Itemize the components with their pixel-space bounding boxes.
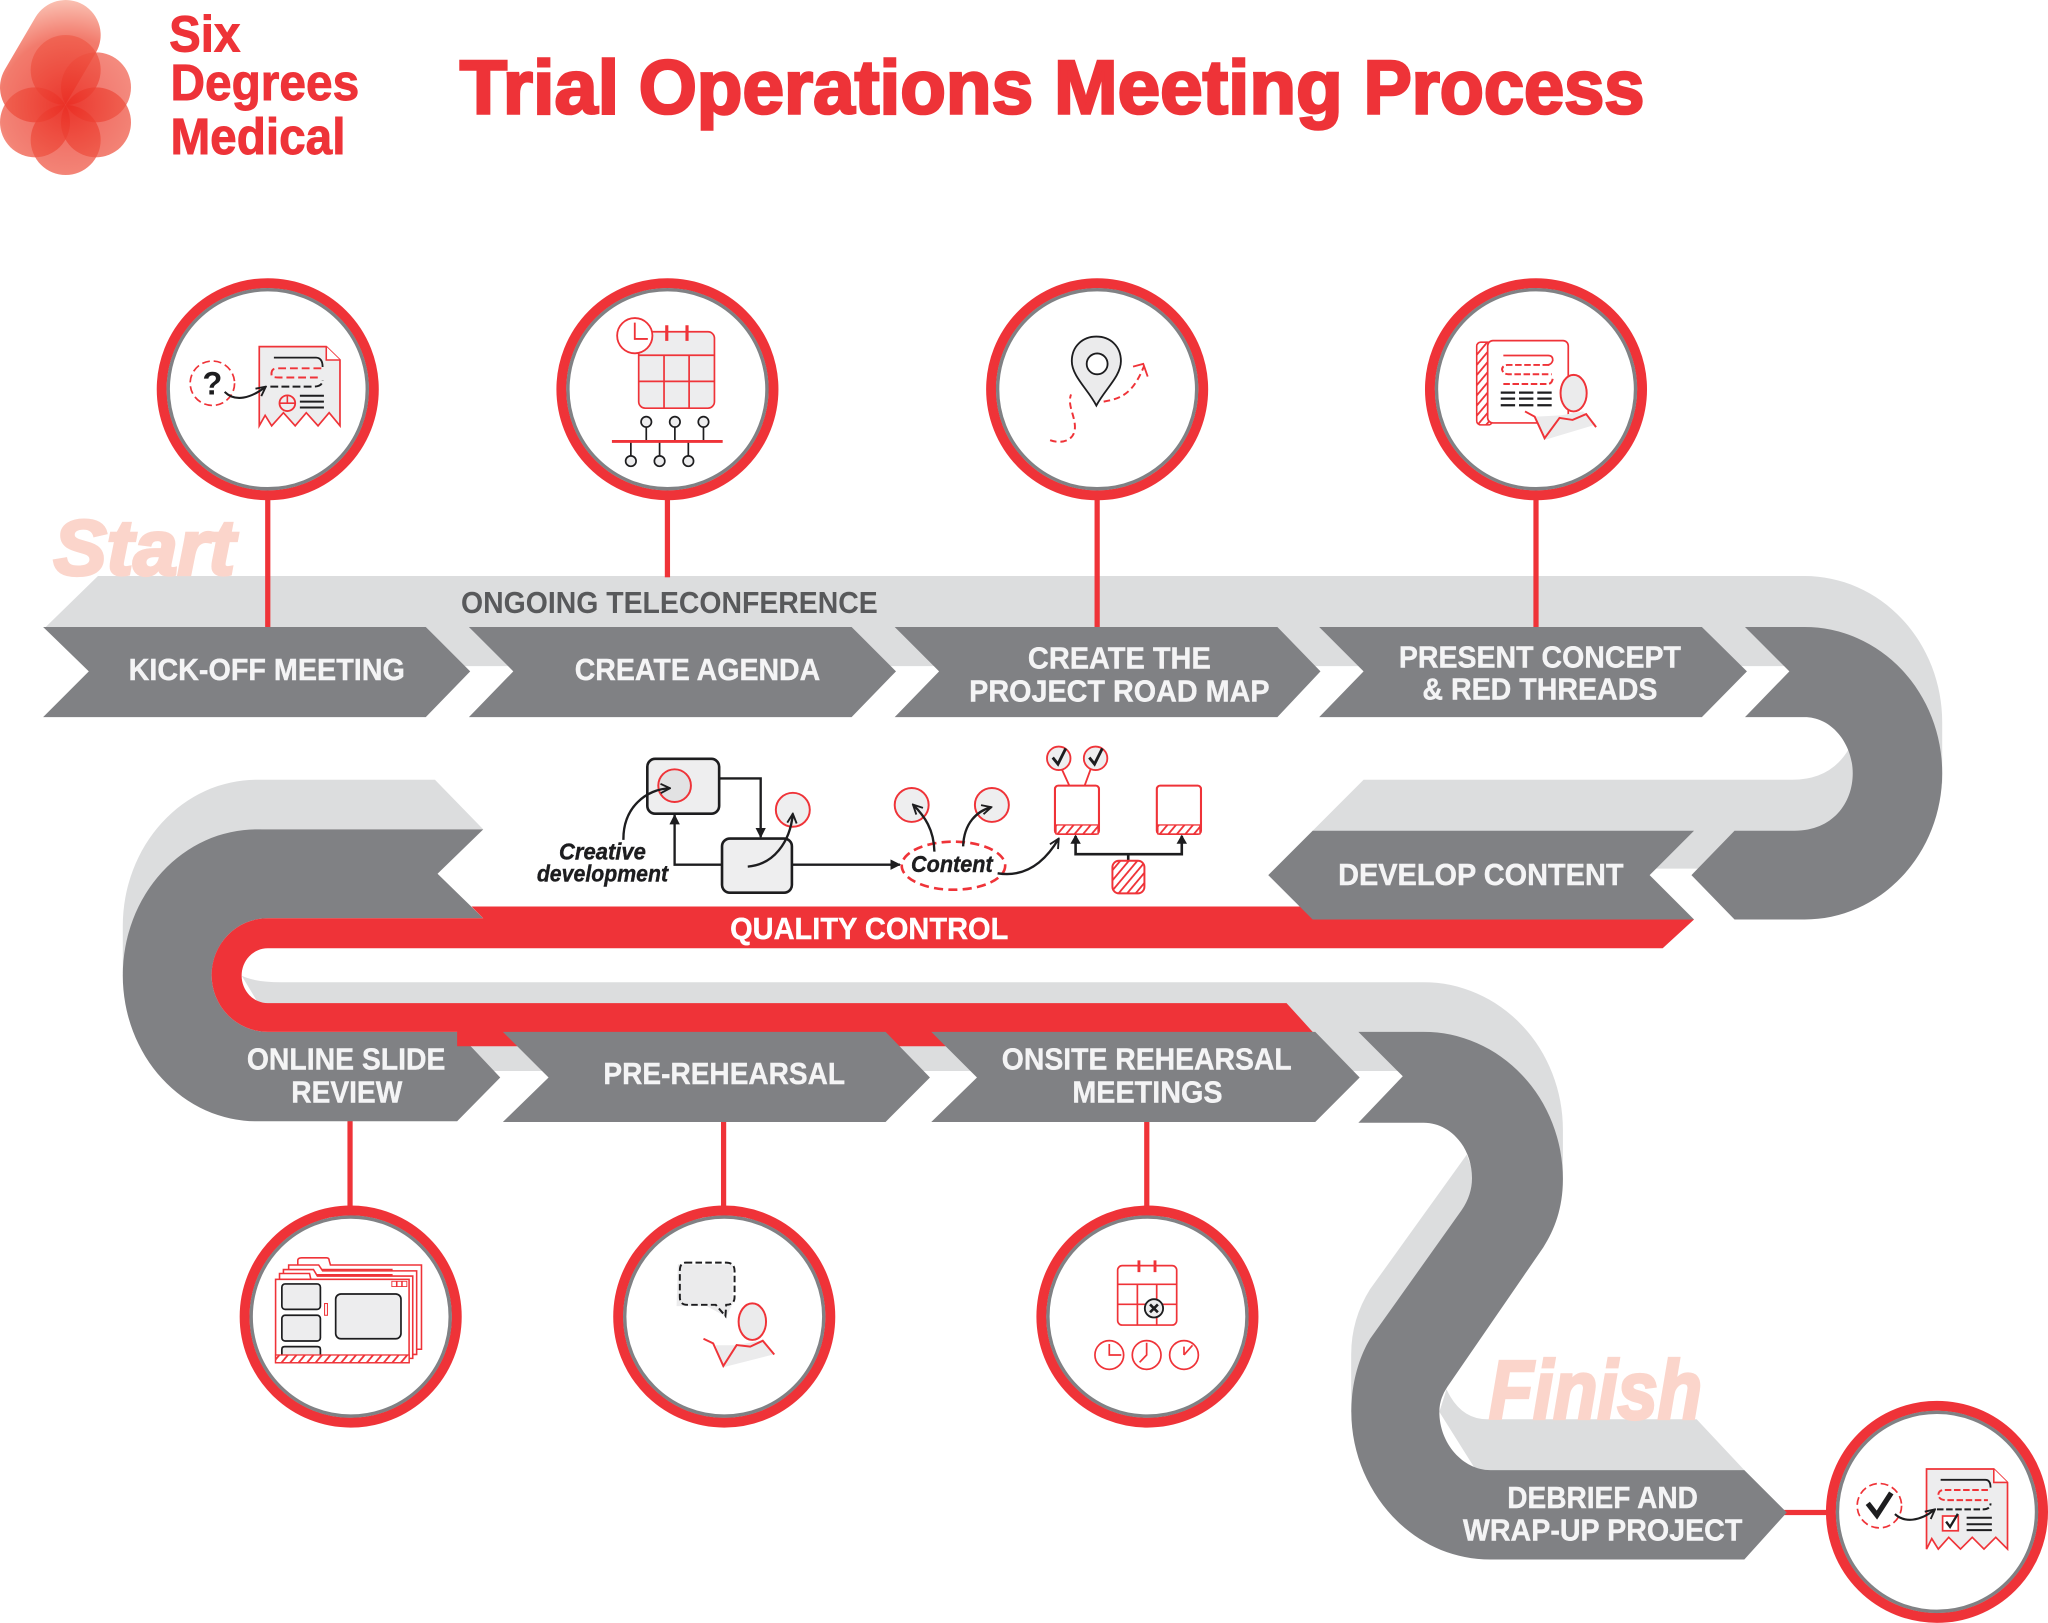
logo wordmark: Degrees (170, 54, 359, 111)
logo wordmark: Six (169, 6, 240, 63)
chevron: pre-rehearsal: PRE-REHEARSAL (603, 1056, 845, 1091)
creative development text: development (537, 861, 669, 887)
finish label: Finish (1489, 1345, 1702, 1436)
label: debrief and wrap-up project (1463, 1480, 1743, 1548)
circle icon: kick-off meeting: ? (202, 364, 222, 401)
circle icon: kick-off meeting (162, 283, 374, 495)
chevron: kick-off meeting: KICK-OFF MEETING (129, 652, 405, 687)
chevron: onsite rehearsal meetings: MEETINGS (1072, 1074, 1223, 1109)
title: Trial (460, 46, 619, 131)
label: online slide review: ONLINE SLIDE (247, 1042, 445, 1077)
label: online slide review (247, 1042, 445, 1109)
ongoing teleconference label: ONGOING TELECONFERENCE (461, 585, 878, 620)
label: debrief and wrap-up project: WRAP-UP PROJECT (1463, 1513, 1743, 1548)
label: debrief and wrap-up project: DEBRIEF AND (1507, 1480, 1698, 1515)
logo wordmark (169, 6, 359, 165)
process ribbon (43, 494, 1942, 1560)
chevron: kick-off meeting (43, 627, 470, 717)
content node: Content (911, 851, 994, 877)
chevron: create the project road map: PROJECT ROAD MAP (969, 673, 1270, 708)
circle icon: create agenda (561, 283, 773, 495)
chevron: present concept and red threads: PRESENT CONCEPT (1399, 639, 1681, 674)
chevron: develop content (1268, 831, 1694, 920)
creative development diagram (537, 747, 1201, 893)
review boxes and checks (1047, 747, 1201, 893)
circle icon: present concept (1430, 283, 1642, 495)
connector stems (265, 494, 1829, 1515)
creative development text (537, 838, 669, 887)
chevron: create the project road map: CREATE THE (1028, 641, 1211, 676)
chevron: onsite rehearsal meetings: ONSITE REHEARSAL (1002, 1042, 1292, 1077)
label: online slide review: REVIEW (291, 1074, 402, 1109)
start label: Start (54, 504, 238, 592)
circle icon: onsite rehearsal meetings (1041, 1211, 1253, 1423)
back ribbon shadows (46, 576, 1942, 1470)
chevron: create agenda: CREATE AGENDA (575, 652, 820, 687)
chevron: develop content: DEVELOP CONTENT (1338, 857, 1624, 892)
content node (895, 788, 1059, 890)
creative development text: Creative (559, 838, 646, 864)
quality control red band (212, 906, 1694, 1046)
logo: Six Degrees Medical (0, 6, 359, 175)
dark curves (123, 627, 1942, 1560)
title: Process (1364, 46, 1644, 131)
chevron: present concept and red threads (1319, 627, 1747, 717)
creative boxes (647, 759, 810, 893)
chevron: create agenda (469, 627, 896, 717)
chevron: onsite rehearsal meetings (931, 1032, 1360, 1122)
title (460, 46, 1644, 131)
title: Operations (639, 46, 1033, 131)
chevron: create the project road map (895, 627, 1320, 717)
chevron: present concept and red threads: & RED THREADS (1422, 671, 1657, 706)
quality control label: QUALITY CONTROL (730, 911, 1008, 946)
logo mark (0, 35, 131, 175)
creative arrows (623, 778, 900, 867)
logo wordmark: Medical (170, 108, 345, 165)
circle icon: pre-rehearsal (618, 1211, 830, 1423)
circle icon: project road map (991, 283, 1203, 495)
circle icon: online slide review (245, 1211, 457, 1423)
circle icon: debrief and wrap-up (1831, 1406, 2043, 1618)
chevron: pre-rehearsal (503, 1032, 930, 1122)
title: Meeting (1054, 46, 1343, 131)
